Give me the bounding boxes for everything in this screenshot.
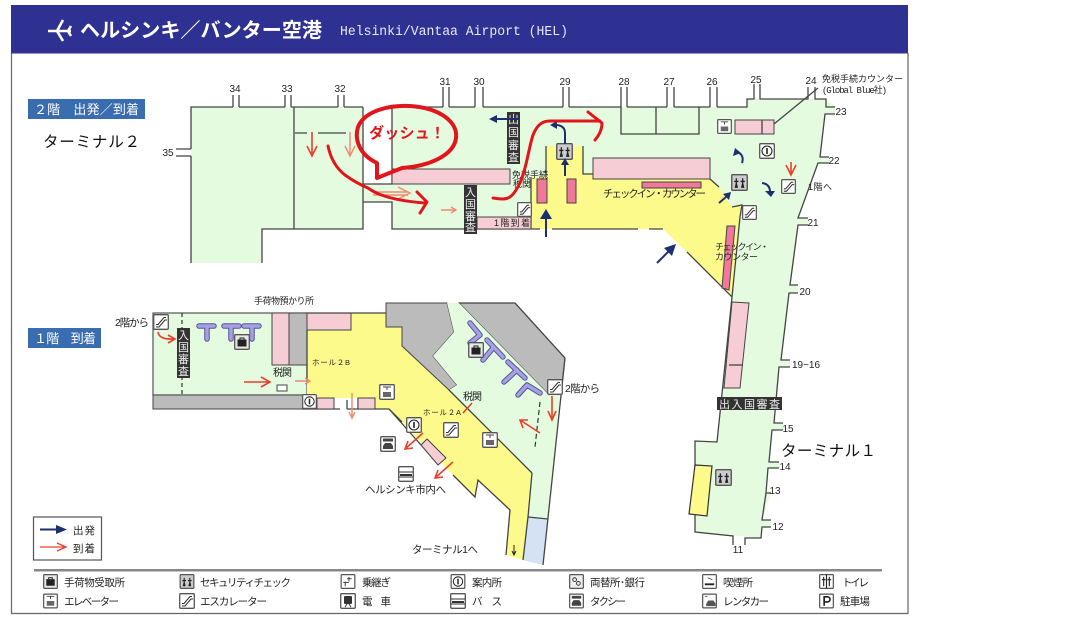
panel: floor 2 map: 審 <box>508 139 519 152</box>
counters floor 1 <box>317 398 334 409</box>
immigration banner floor 1 <box>177 328 190 378</box>
panel: floor 2 map <box>162 73 903 556</box>
gate numbers: 28 <box>618 77 630 88</box>
page frame <box>12 53 908 614</box>
panel: floor 1 map: 国 <box>178 341 189 354</box>
gate numbers: 21 <box>807 218 819 229</box>
baggage carousels <box>199 323 540 395</box>
panel: floor 1 map: 税関 <box>273 366 292 379</box>
legend: facility icons: タクシー <box>590 596 626 608</box>
gate numbers: 25 <box>750 75 762 86</box>
gate numbers: 20 <box>799 287 811 298</box>
panel: floor 2 map: (Global Blue社) <box>822 84 887 96</box>
panel: floor 2 map: 査 <box>508 150 519 164</box>
panel: floor 1 map: 2階から <box>115 317 149 329</box>
panel: floor 2 departures and arrivals label: ２階 出発／到着 <box>34 102 139 117</box>
panel: floor 2 map: 国 <box>465 198 476 211</box>
panel: floor 1 map <box>115 295 600 565</box>
gate numbers: 27 <box>663 77 675 88</box>
legend: facility icons: 手荷物受取所 <box>64 576 126 589</box>
legend divider <box>34 569 882 572</box>
check-in walls <box>176 84 835 545</box>
legend: facility icons: レンタカー <box>723 596 769 608</box>
panel: floor 1 map: ターミナル1へ <box>412 544 478 556</box>
panel: floor 1 map: 入 <box>178 330 189 342</box>
icon: airplane <box>48 20 71 41</box>
panel: floor 2 map: 審 <box>465 210 476 223</box>
labels floor 2: 免税手続カウンター <box>822 73 903 84</box>
panel: floor 2 map: 入 <box>465 187 476 199</box>
panel: floor 2 map: 出入国審査 <box>719 397 780 411</box>
annotation: red hand-drawn speech bubble <box>357 106 456 178</box>
legend: arrows <box>34 517 102 560</box>
legend: facility icons: エレベーター <box>64 596 119 608</box>
header banner <box>11 5 908 54</box>
gate numbers: 24 <box>805 76 817 87</box>
terminal 2 west hall <box>191 107 363 263</box>
panel: floor 1 map: ホール２A <box>423 408 461 417</box>
gate numbers: 22 <box>828 156 840 167</box>
panel: floor 2 map: 免税手続 <box>512 169 548 180</box>
annotation: red route through security <box>493 112 602 199</box>
arrivals green hall <box>153 313 307 395</box>
panel: floor 1 arrivals label: １階 到着 <box>34 331 96 346</box>
gate numbers <box>162 75 847 556</box>
legend: facility icons: 両替所･銀行 <box>590 576 646 589</box>
panel: floor 2 map: ターミナル１ <box>781 442 876 460</box>
icons floor 2 <box>718 120 731 133</box>
panel: floor 2 map: 査 <box>465 220 476 234</box>
blue walkway <box>523 517 548 565</box>
gray block west <box>386 303 457 390</box>
panel: floor 1 arrivals label <box>28 328 101 348</box>
title: ヘルシンキ／バンター空港 <box>80 19 322 42</box>
gray service strip <box>153 395 303 409</box>
gate numbers: 12 <box>772 522 784 533</box>
gate numbers: 26 <box>706 77 718 88</box>
legend: arrows: 到着 <box>73 542 95 555</box>
legend: facility icons: トイレ <box>842 577 869 589</box>
gate numbers: 29 <box>559 77 571 88</box>
gate numbers: 35 <box>162 148 174 159</box>
legend: facility icons: 電 車 <box>362 595 391 608</box>
gate numbers: 13 <box>769 486 781 497</box>
labels floor 1: 手荷物預かり所 <box>254 295 314 306</box>
arrows floor 2 <box>307 132 796 175</box>
gate numbers: 32 <box>334 84 346 95</box>
legend: facility icons: 駐車場 <box>840 595 870 608</box>
gate numbers: 33 <box>281 84 293 95</box>
green baggage hall <box>433 303 561 519</box>
panel: floor 2 departures and arrivals label <box>28 99 145 119</box>
panel: floor 2 map: 1階到着 <box>494 217 530 228</box>
gate numbers: 14 <box>779 462 791 473</box>
panel: floor 2 map: カウンター <box>715 252 758 262</box>
main concourse floor <box>363 99 835 538</box>
panel: floor 1 map: ホール２B <box>312 358 350 367</box>
legend: facility icons: 喫煙所 <box>723 576 754 589</box>
panel: floor 2 map: 1階へ <box>808 182 832 192</box>
annotation text: ダッシュ！ <box>369 124 445 142</box>
gate numbers: 23 <box>835 107 847 118</box>
annotation: red route to transfer <box>328 146 427 213</box>
yellow check-in hall <box>531 146 742 297</box>
legend: facility icons <box>44 575 870 608</box>
legend: facility icons: セキュリティチェック <box>200 577 291 589</box>
gate numbers: 15 <box>782 424 794 435</box>
subtitle: Helsinki/Vantaa Airport (HEL) <box>340 25 568 40</box>
legend: facility icons: エスカレーター <box>200 596 267 608</box>
panel: floor 1 map: 審 <box>178 353 189 366</box>
legend: facility icons: 乗継ぎ <box>362 576 391 589</box>
icons floor 1 <box>154 315 168 329</box>
panel: floor 1 map: 査 <box>178 364 189 378</box>
gate numbers: 34 <box>229 84 241 95</box>
counters floor 2 <box>392 169 510 184</box>
legend: facility icons: バ ス <box>472 596 502 608</box>
panel: floor 2 map: 出 <box>508 113 519 126</box>
legend: arrows: 出発 <box>73 524 96 537</box>
panel: floor 2 map: チェックイン・カウンター <box>603 188 706 200</box>
panel: floor 2 map: チェックイン・ <box>715 242 769 252</box>
panel: floor 1 map: ヘルシンキ市内へ <box>365 483 446 496</box>
arrows floor 1 <box>158 332 556 478</box>
panel: floor 2 map: 税関 <box>513 178 531 189</box>
yellow arrival hall <box>302 313 532 560</box>
panel: floor 2 map: 国 <box>508 126 519 139</box>
gate numbers: 30 <box>473 77 485 88</box>
immigration banners <box>507 112 520 164</box>
gate numbers: 11 <box>733 545 744 556</box>
heading: terminal 2: ターミナル２ <box>43 133 140 151</box>
legend: facility icons: 案内所 <box>472 576 502 589</box>
gate numbers: 19~16 <box>792 360 820 371</box>
panel: floor 1 map: 2階から <box>565 383 600 395</box>
gate numbers: 31 <box>439 77 451 88</box>
panel: floor 1 map: 税関 <box>463 390 482 403</box>
gray block east <box>459 303 565 393</box>
